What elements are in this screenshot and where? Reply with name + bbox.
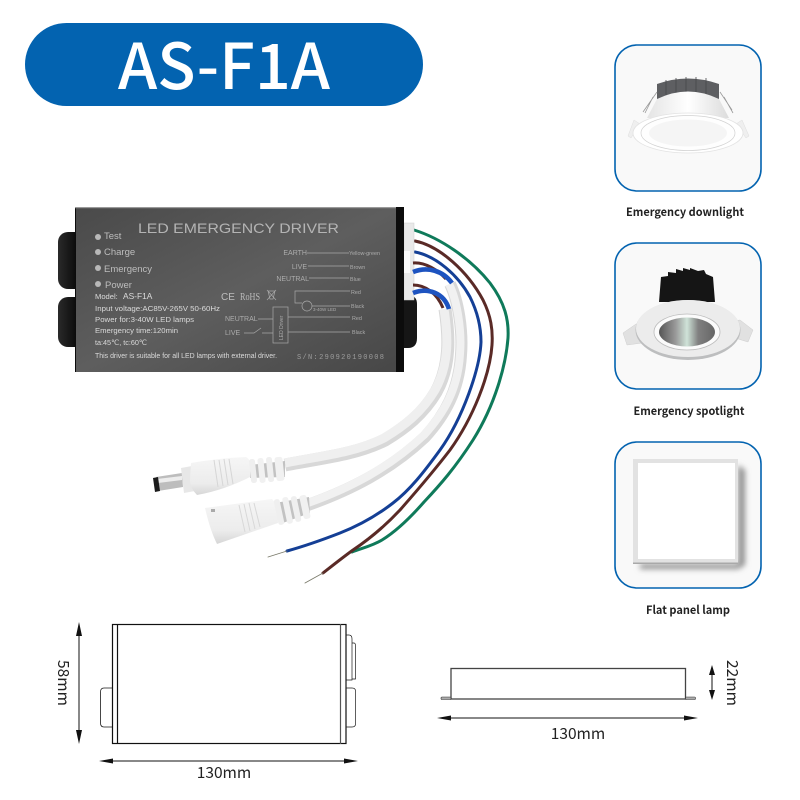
wiring diagram: Black	[352, 330, 365, 336]
wires: green, brown and blue mains leads	[268, 230, 508, 583]
label: 22mm: 22mm	[722, 660, 744, 706]
wiring diagram: Blue	[350, 277, 361, 283]
top view dimension drawing	[53, 622, 358, 783]
wiring diagram: 3-40W LED	[313, 307, 337, 312]
certification marks	[221, 290, 276, 303]
certification marks: RoHS	[240, 292, 260, 303]
white terminal connector	[404, 223, 414, 300]
specification text: Emergency time:120min	[95, 326, 178, 335]
card: flat panel lamp	[615, 442, 761, 618]
driver rear end cap	[400, 296, 417, 348]
title pill	[25, 17, 423, 108]
white cable to DC socket	[308, 284, 461, 505]
indicator lights: Charge	[104, 247, 135, 258]
arrow: width dimension	[437, 716, 698, 720]
arrow: width dimension	[99, 758, 358, 764]
wiring diagram: Red	[351, 290, 361, 296]
icon: flat panel	[633, 459, 745, 569]
arrow: height dimension	[76, 622, 82, 744]
wiring diagram: NEUTRAL	[276, 276, 309, 283]
white cable to DC plug	[285, 309, 448, 465]
label: 130mm: 130mm	[551, 722, 605, 744]
specification text: This driver is suitable for all LED lamps with external driver.	[95, 351, 277, 360]
wiring diagram: Red	[352, 316, 362, 322]
label: Emergency downlight: Emergency downlight	[626, 204, 744, 220]
title pill: AS-F1A	[118, 17, 331, 108]
wiring diagram: LED Driver	[279, 315, 285, 340]
card: emergency spotlight	[615, 243, 761, 419]
wiring diagram: Brown	[350, 265, 365, 271]
card: emergency downlight	[615, 45, 761, 220]
outline: top view	[100, 624, 356, 744]
serial number: S/N:290920190008	[297, 354, 384, 362]
wiring diagram	[225, 250, 380, 343]
specification text: AS-F1A	[123, 291, 153, 301]
label: 130mm: 130mm	[197, 761, 251, 783]
label: Flat panel lamp: Flat panel lamp	[646, 602, 730, 618]
wiring diagram: LIVE	[292, 264, 307, 271]
wiring diagram: NEUTRAL	[225, 316, 258, 323]
driver body with printed label	[75, 207, 404, 372]
DC plug connector	[153, 457, 285, 495]
arrow: height dimension	[709, 665, 715, 700]
label: Emergency spotlight: Emergency spotlight	[634, 403, 745, 419]
driver left end caps	[58, 232, 88, 347]
icon: downlight	[628, 77, 749, 153]
icon: spotlight	[623, 268, 753, 360]
outline: side view	[441, 668, 696, 700]
specification text: Model:	[95, 292, 118, 301]
specification text: Power for:3-40W LED lamps	[95, 315, 194, 324]
certification marks: CE	[221, 292, 235, 303]
specification text: ta:45℃, tc:60℃	[95, 338, 147, 347]
heading: LED EMERGENCY DRIVER: LED EMERGENCY DRIVER	[138, 220, 339, 236]
specification text: Input voltage:AC85V-265V 50-60Hz	[95, 304, 220, 313]
indicator lights	[95, 231, 152, 291]
DC socket connector	[205, 495, 311, 544]
specification text	[95, 291, 277, 360]
indicator lights: Emergency	[104, 264, 152, 275]
side view dimension drawing	[437, 660, 744, 744]
wiring diagram: LIVE	[225, 330, 241, 337]
wiring diagram: Yellow-green	[349, 251, 380, 257]
indicator lights: Power	[105, 280, 132, 291]
wiring diagram: EARTH	[283, 250, 307, 257]
wiring diagram: Black	[351, 304, 364, 310]
short brown and blue conductors	[413, 263, 452, 309]
label: 58mm: 58mm	[53, 660, 75, 706]
indicator lights: Test	[104, 231, 122, 242]
